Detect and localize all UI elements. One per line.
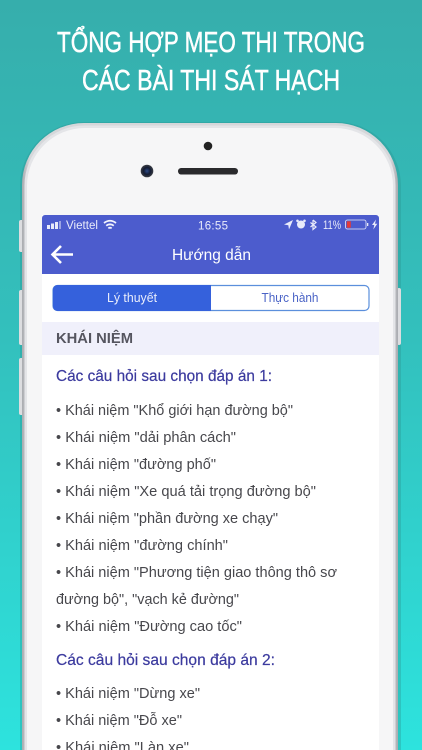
list: answer 1: • Khái niệm "phần đường xe chạy"	[56, 510, 278, 527]
list: answer 1	[56, 402, 337, 635]
wifi icon	[104, 221, 116, 228]
list: answer 1: • Khái niệm "đường phố"	[56, 456, 216, 473]
back arrow	[52, 246, 73, 263]
section band	[42, 322, 379, 355]
list: answer 1: đường bộ", "vạch kẻ đường"	[56, 591, 239, 608]
segmented tabs	[53, 285, 369, 311]
title: CÁC BÀI THI SÁT HẠCH	[82, 64, 340, 97]
heading: answer 2: Các câu hỏi sau chọn đáp án 2:	[56, 652, 275, 669]
list: answer 1: • Khái niệm "Phương tiện giao thông thô sơ	[56, 564, 337, 581]
app screen	[42, 215, 379, 750]
list: answer 1: • Khái niệm "Xe quá tải trọng đường bộ"	[56, 483, 316, 500]
list: answer 2: • Khái niệm "Dừng xe"	[56, 685, 200, 702]
app header	[42, 215, 379, 274]
status bar: Viettel	[66, 220, 98, 232]
segmented tabs: Lý thuyết	[107, 291, 158, 305]
header title: Hướng dẫn	[172, 247, 251, 264]
alarm icon	[296, 220, 306, 228]
bluetooth icon	[310, 220, 316, 230]
front camera	[141, 165, 153, 177]
section band: KHÁI NIỆM	[56, 329, 133, 347]
signal bars	[47, 221, 61, 229]
battery	[346, 220, 368, 229]
list: answer 1: • Khái niệm "dải phân cách"	[56, 429, 236, 446]
segmented tabs: Thực hành	[262, 291, 319, 305]
phone body	[19, 122, 401, 750]
location arrow	[284, 220, 293, 230]
title	[57, 25, 365, 97]
speaker	[178, 168, 238, 174]
status bar: 16:55	[198, 220, 228, 232]
list: answer 1: • Khái niệm "đường chính"	[56, 537, 228, 554]
list: answer 2	[56, 685, 200, 750]
heading: answer 1: Các câu hỏi sau chọn đáp án 1:	[56, 368, 272, 385]
charging bolt	[372, 220, 377, 230]
status bar	[47, 220, 377, 232]
list: answer 1: • Khái niệm "Khổ giới hạn đường bộ"	[56, 402, 293, 419]
side buttons	[19, 220, 401, 415]
status bar: 11%	[323, 220, 341, 232]
list: answer 1: • Khái niệm "Đường cao tốc"	[56, 618, 242, 635]
sensor dot	[204, 142, 212, 150]
list: answer 2: • Khái niệm "Đỗ xe"	[56, 712, 182, 729]
